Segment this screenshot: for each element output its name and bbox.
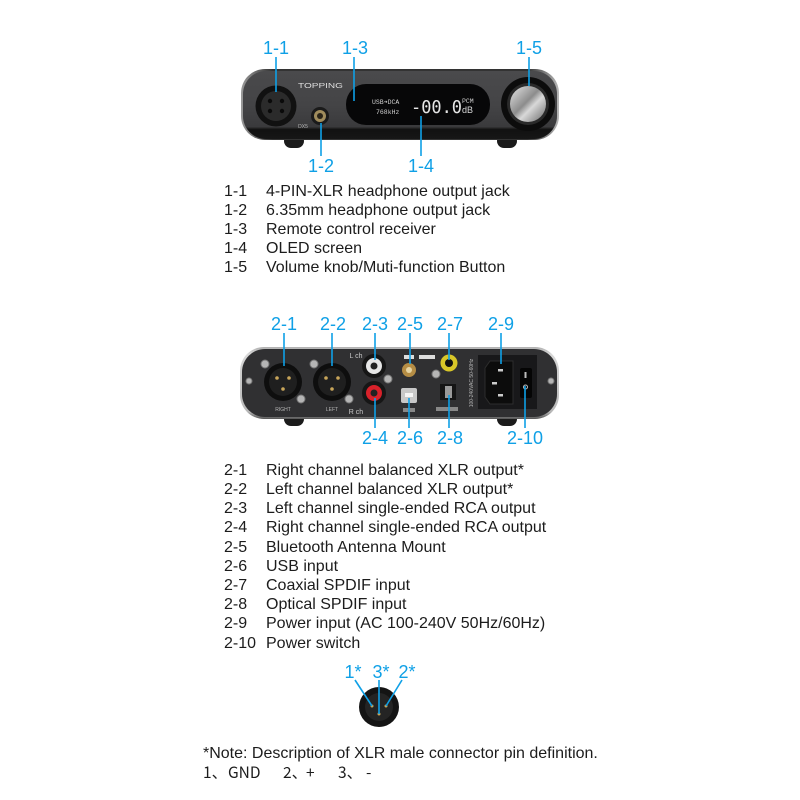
pin 2 callout: 2* [398,662,416,682]
legend 2-3: 2-3 [224,500,247,517]
USB input [401,388,417,412]
callout 2-7: 2-7 [437,314,463,334]
panel: rear view device [240,347,559,426]
legend 2-6: USB input [266,558,339,575]
pin definition text: - [366,761,371,783]
brand logo: TOPPING [298,81,343,90]
coaxial input [419,354,458,372]
legend 2-6: 2-6 [224,558,247,575]
legend 2-1: 2-1 [224,462,247,479]
IEC inlet [485,361,513,404]
pin definition text: 1、 [203,761,227,783]
channel labels: L ch [350,353,363,360]
voltage label: 100-240VAC 50-60Hz [469,358,475,407]
legend 1-5: 1-5 [224,259,247,276]
chassis rim [241,69,559,140]
chassis back [242,349,557,417]
OLED screen [346,84,490,125]
callout 2-6 [397,398,423,448]
XLR labels [275,407,338,413]
pin 1 callout: 1* [344,662,362,682]
callout 2-4: 2-4 [362,428,388,448]
callout 2-6: 2-6 [397,428,423,448]
pin definition text: + [306,761,315,783]
volume knob [501,77,555,131]
legend 2-5: Bluetooth Antenna Mount [266,539,446,556]
callout 2-10: 2-10 [507,428,543,448]
callout 2-4 [362,398,388,448]
pin definition text: 2、 [283,761,307,783]
legend 2-7: 2-7 [224,577,247,594]
XLR right [264,363,302,401]
legend 2-2: Left channel balanced XLR output* [266,481,513,498]
legend 1-1: 1-1 [224,183,247,200]
power block [478,355,537,409]
callout 1-5 [516,38,542,86]
chassis rim [240,347,559,419]
legend 2-4: Right channel single-ended RCA output [266,519,547,536]
callout 1-3 [342,38,368,101]
callouts: front view [263,38,542,176]
legend 1-3: Remote control receiver [266,221,437,238]
OLED screen: PCM [462,98,474,105]
legend 1-4: OLED screen [266,240,362,257]
callouts: rear view [271,314,543,448]
jack label: DX5 [298,124,308,130]
pin definition text: GND [228,761,261,783]
callout 1-4 [408,116,434,176]
pin definition text: 3、 [338,761,362,783]
legend 1-3: 1-3 [224,221,247,238]
callout 2-1 [271,314,297,366]
antenna mount [402,355,416,377]
XLR labels: RIGHT [275,407,291,413]
foot right [497,134,517,148]
legend 1-5: Volume knob/Muti-function Button [266,259,505,276]
XLR socket [256,86,296,126]
foot right [497,412,517,426]
legend 2-5: 2-5 [224,539,247,556]
OLED screen: USB➔DCA [372,99,399,106]
headphone jack [311,107,329,125]
callout 1-1: 1-1 [263,38,289,58]
legend 2-2: 2-2 [224,481,247,498]
legend 1-2: 6.35mm headphone output jack [266,202,491,219]
callout 2-1: 2-1 [271,314,297,334]
legend 2-10: Power switch [266,635,360,652]
callout 2-8: 2-8 [437,428,463,448]
foot left [284,412,304,426]
power switch [520,368,532,398]
chassis face [243,71,557,139]
callout 2-8 [437,395,463,448]
legend 2-9: Power input (AC 100-240V 50Hz/60Hz) [266,615,545,632]
legend 2-4: 2-4 [224,519,247,536]
callout 1-3: 1-3 [342,38,368,58]
callout 1-4: 1-4 [408,156,434,176]
RCA left output [362,354,386,378]
OLED screen: -00.0 [411,97,462,118]
text block: front legend [224,183,511,276]
callout 1-1 [263,38,289,92]
legend 2-7: Coaxial SPDIF input [266,577,411,594]
panel: front view device [241,69,559,148]
callout 2-3: 2-3 [362,314,388,334]
RCA right output [362,381,386,405]
OLED screen: dB [462,105,473,115]
XLR left [313,363,351,401]
channel labels: R ch [349,409,363,416]
connector body [359,687,399,727]
mounting screws [246,360,554,403]
text block: rear legend [224,462,547,652]
callout 2-10 [507,386,543,448]
callout 1-5: 1-5 [516,38,542,58]
callout 2-3 [362,314,388,360]
diagram: XLR male connector pins [344,662,416,727]
note text: *Note: Description of XLR male connector pin definition. [203,745,598,762]
legend 2-9: 2-9 [224,615,247,632]
callout 1-2 [308,123,334,176]
channel labels [349,353,363,416]
callout 2-9: 2-9 [488,314,514,334]
legend 2-1: Right channel balanced XLR output* [266,462,524,479]
callout 2-9 [488,314,514,364]
legend 1-4: 1-4 [224,240,247,257]
legend 2-8: 2-8 [224,596,247,613]
callout 2-5: 2-5 [397,314,423,334]
callout 1-2: 1-2 [308,156,334,176]
foot left [284,134,304,148]
legend 1-2: 1-2 [224,202,247,219]
legend 1-1: 4-PIN-XLR headphone output jack [266,183,511,200]
callout 2-7 [437,314,463,360]
legend 2-8: Optical SPDIF input [266,596,407,613]
callout 2-2: 2-2 [320,314,346,334]
legend 2-10: 2-10 [224,635,256,652]
callout 2-2 [320,314,346,366]
legend 2-3: Left channel single-ended RCA output [266,500,536,517]
pin 3 callout: 3* [372,662,390,682]
callout 2-5 [397,314,423,364]
optical input [436,384,458,411]
XLR labels: LEFT [326,407,338,413]
OLED screen: 768kHz [376,109,400,116]
